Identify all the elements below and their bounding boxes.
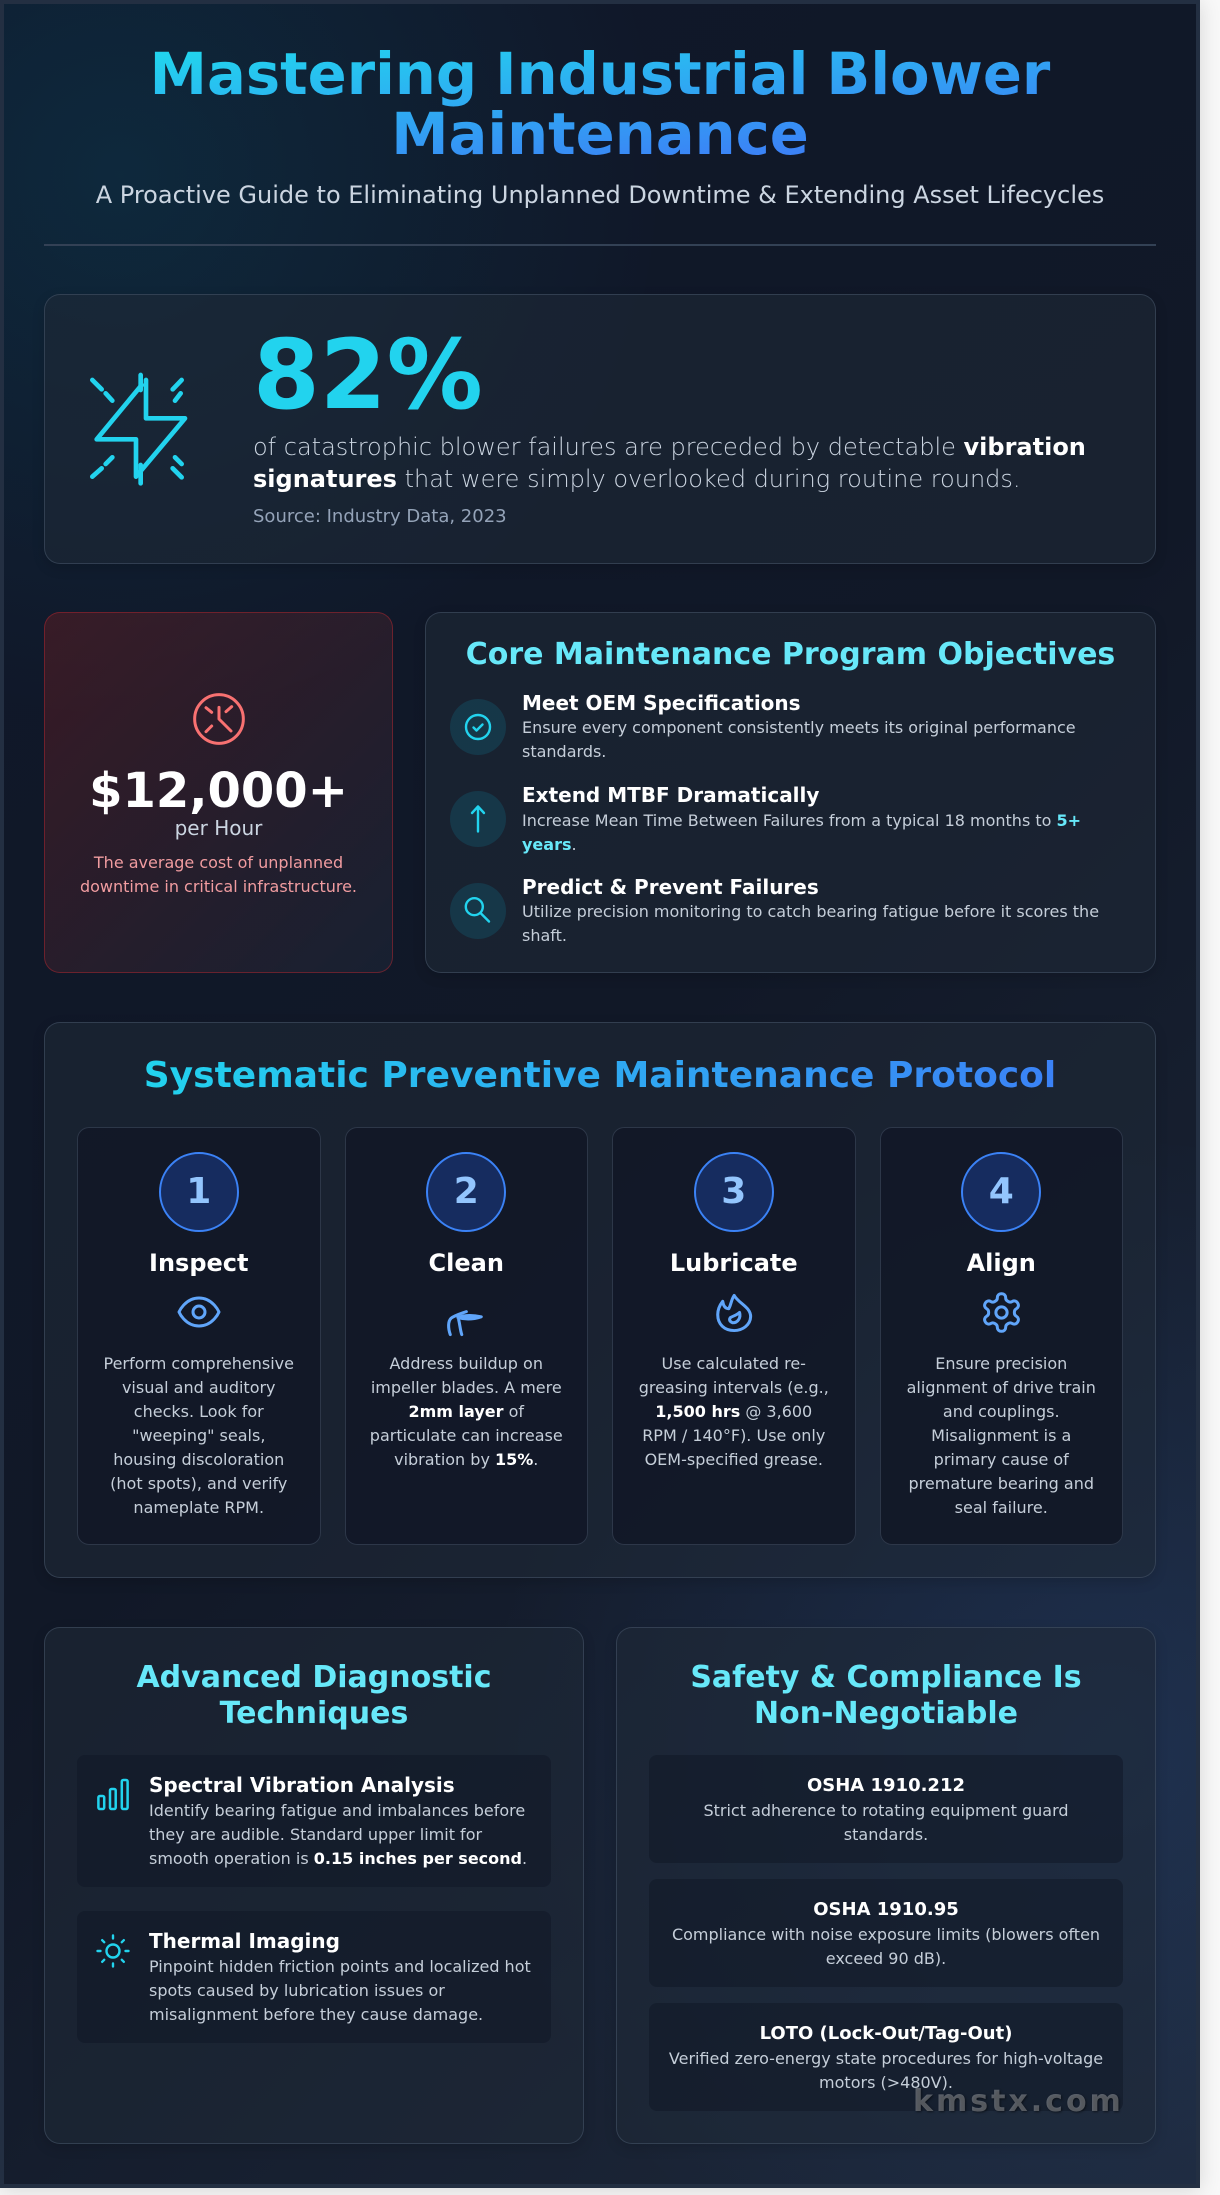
technique text: Pinpoint hidden friction points and localized hot [149,1957,531,1976]
icon: flame [716,1294,752,1332]
step text [370,1354,563,1469]
step text: Address buildup on [390,1354,543,1373]
step text [639,1354,829,1469]
rule text: Strict adherence to rotating equipment guard [703,1800,1069,1820]
rule text [669,2048,1103,2092]
number badge: 3 [721,1171,746,1212]
technique title: Spectral Vibration Analysis [149,1773,455,1797]
step text: nameplate RPM. [133,1498,264,1517]
objective text: Ensure every component consistently meets its original performance [522,718,1076,737]
icon: clock [193,693,245,745]
rule: OSHA 1910.95 [649,1879,1123,1987]
rule title: LOTO (Lock-Out/Tag-Out) [760,2022,1012,2044]
number badge: 4 [989,1171,1014,1212]
objective text [522,718,1076,761]
objective text [522,902,1099,945]
rule: OSHA 1910.212 [649,1755,1123,1863]
number badge [426,1152,506,1232]
heading: Core Maintenance Program Objectives [466,637,1115,672]
objective 3 [450,875,1099,945]
objective text: Utilize precision monitoring to catch bearing fatigue before it scores the [522,902,1099,921]
hero description [253,432,1086,492]
step text [103,1354,294,1517]
step text: housing discoloration [113,1450,284,1469]
objective title: Meet OEM Specifications [522,691,801,715]
rule text: exceed 90 dB). [826,1948,946,1968]
objective text: shaft. [522,926,567,945]
rule text [703,1800,1069,1844]
cost figure: $12,000+ [89,763,348,819]
cost description [80,852,357,896]
step 4 align [880,1127,1123,1545]
subtitle: A Proactive Guide to Eliminating Unplanned Downtime & Extending Asset Lifecycles [96,181,1104,209]
technique text: they are audible. Standard upper limit for [149,1825,482,1844]
title: Mastering Industrial Blower [150,40,1050,108]
rule text [672,1924,1100,1968]
rule: LOTO [649,2003,1123,2111]
step 2 clean [344,1127,588,1545]
step text: impeller blades. A mere [371,1378,562,1397]
step text [907,1354,1096,1517]
heading: Advanced Diagnostic [136,1660,492,1695]
title: Maintenance [391,100,809,168]
heading [690,1660,1082,1731]
step text: premature bearing and [908,1474,1094,1493]
number badge [961,1152,1041,1232]
objective 2 [450,783,1081,854]
panel: preventive maintenance protocol [44,1022,1156,1578]
technique text [149,1957,531,2024]
step text: Ensure precision [935,1354,1067,1373]
panel: safety and compliance [616,1627,1156,2144]
step name: Align [967,1249,1036,1277]
objective title: Predict & Prevent Failures [522,875,819,899]
step name: Clean [429,1249,504,1277]
objective 1 [450,691,1076,761]
rule text: Verified zero-energy state procedures for high-voltage [669,2048,1103,2068]
icon: magnifier [450,883,506,939]
step text: greasing intervals (e.g., [639,1378,829,1397]
step text: alignment of drive train [907,1378,1096,1397]
technique text: Identify bearing fatigue and imbalances before [149,1801,525,1820]
step text: (hot spots), and verify [110,1474,287,1493]
icon: vibrating lightning bolt [90,372,188,486]
heading: Non-Negotiable [754,1696,1018,1731]
number badge: 1 [186,1171,211,1212]
cost description: The average cost of unplanned [94,852,343,872]
step text: Misalignment is a [931,1426,1071,1445]
step text: seal failure. [955,1498,1048,1517]
step text: checks. Look for [134,1402,264,1421]
technique title: Thermal Imaging [149,1929,340,1953]
heading: Safety & Compliance Is [690,1660,1082,1695]
step text: "weeping" seals, [132,1426,265,1445]
technique text: spots caused by lubrication issues or [149,1981,445,2000]
icon: bar chart [97,1778,129,1810]
step text: particulate can increase [370,1426,563,1445]
technique: spectral vibration [77,1755,551,1887]
heading: Systematic Preventive Maintenance Protocol [144,1055,1056,1096]
step text: RPM / 140°F). Use only [642,1426,825,1445]
title [44,44,1156,164]
source note: Source: Industry Data, 2023 [253,506,507,527]
step text: OEM-specified grease. [645,1450,823,1469]
technique text: misalignment before they cause damage. [149,2005,483,2024]
heading: Techniques [220,1696,408,1731]
hero description: of catastrophic blower failures are preceded by detectable vibration [253,432,1086,460]
panel: hero statistic [44,294,1156,564]
watermark: kmstx.com [913,2084,1124,2118]
step text: visual and auditory [122,1378,276,1397]
icon: eye [178,1296,220,1328]
step text: 1,500 hrs @ 3,600 [655,1402,812,1421]
rule text: standards. [844,1824,928,1844]
step 3 lubricate [612,1127,856,1545]
number badge [694,1152,774,1232]
objective text: standards. [522,742,606,761]
rule title: OSHA 1910.95 [813,1898,959,1920]
objective title: Extend MTBF Dramatically [522,783,819,807]
heading [136,1660,492,1731]
step name: Lubricate [670,1249,798,1277]
cost description: downtime in critical infrastructure. [80,876,357,896]
rule text: motors (>480V). [819,2072,953,2092]
objective text: years. [522,834,577,854]
step name: Inspect [149,1249,248,1277]
number badge: 2 [454,1171,479,1212]
step text: and couplings. [943,1402,1060,1421]
technique text [149,1801,527,1868]
objective text [522,810,1081,854]
technique text: smooth operation is 0.15 inches per second. [149,1849,527,1868]
panel: advanced diagnostic techniques [44,1627,584,2144]
rule title: OSHA 1910.212 [807,1774,965,1796]
hero description: signatures that were simply overlooked during routine rounds. [253,464,1021,492]
step text: primary cause of [934,1450,1069,1469]
step text: 2mm layer of [408,1402,524,1421]
panel: cost of downtime [44,612,393,973]
step text: vibration by 15%. [394,1450,538,1469]
objective text: Increase Mean Time Between Failures from a typical 18 months to 5+ [522,810,1081,830]
technique: thermal imaging [77,1911,551,2043]
step text: Perform comprehensive [103,1354,294,1373]
icon: arrow up [450,791,506,847]
panel: core objectives [425,612,1156,973]
icon: brush [447,1310,483,1336]
big number 82%: 82% [253,319,483,431]
icon: gear [983,1292,1020,1333]
number badge [159,1152,239,1232]
icon: check circle [450,699,506,755]
step 1 inspect [77,1127,320,1545]
step text: Use calculated re- [662,1354,806,1373]
rule text: Compliance with noise exposure limits (blowers often [672,1924,1100,1944]
per hour label: per Hour [175,816,262,840]
icon: sun [96,1934,130,1968]
